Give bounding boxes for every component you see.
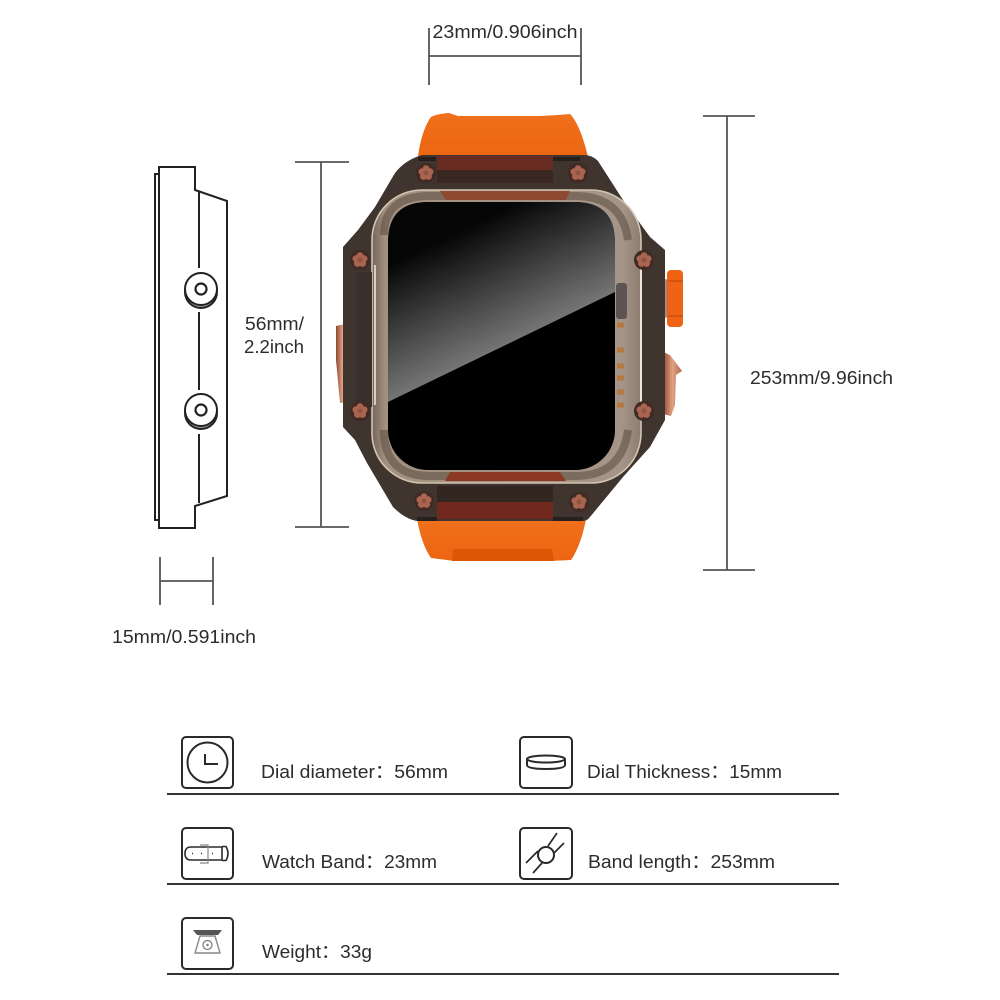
- side view of watch case: [155, 167, 227, 528]
- dimension: case thickness 15mm: [112, 557, 256, 647]
- case top band: [418, 156, 580, 183]
- spec row: band length: [520, 828, 775, 879]
- translucent inner frame: [372, 190, 641, 483]
- label: watch band: Watch Band：23mm: [262, 851, 437, 872]
- divider row 2: [167, 883, 839, 885]
- spec row: weight: [182, 918, 372, 969]
- dimension: total length 253mm: 253mm/9.96inch: [750, 367, 893, 388]
- crown: [658, 270, 683, 327]
- spec row: dial diameter: [182, 737, 448, 788]
- dimension: case thickness 15mm: 15mm/0.591inch: [112, 626, 256, 647]
- internal parts seen through left side: [356, 265, 376, 407]
- case body: [343, 155, 665, 521]
- side buttons: [336, 323, 682, 416]
- screen: [388, 202, 615, 470]
- case bottom band: [417, 486, 583, 521]
- side button: upper: [185, 273, 217, 308]
- icon: disc: [520, 737, 572, 788]
- side button: lower: [185, 394, 217, 429]
- label: band length: Band length：253mm: [588, 851, 775, 872]
- dimension: case height 56mm: 2.2inch: [244, 336, 304, 357]
- divider row 3: [167, 973, 839, 975]
- label: dial thickness: Dial Thickness：15mm: [587, 761, 782, 782]
- dimension: strap width 23mm: 23mm/0.906inch: [432, 21, 578, 42]
- dimension: case height 56mm: [244, 162, 349, 527]
- strap: bottom: [417, 519, 586, 561]
- icon: weighing scale: [182, 918, 233, 969]
- icon: strap buckle: [182, 828, 233, 879]
- case screws: [350, 163, 654, 512]
- icon: watch with strap lines: [520, 828, 572, 879]
- dimension: case height 56mm: 56mm/: [245, 313, 305, 334]
- label: weight: Weight：33g: [262, 941, 372, 962]
- divider row 1: [167, 793, 839, 795]
- spec row: dial thickness: [520, 737, 782, 788]
- spec row: watch band: [182, 828, 437, 879]
- icon: clock: [182, 737, 233, 788]
- strap: top: [418, 113, 588, 157]
- dimension: strap width 23mm: [429, 21, 581, 85]
- dimension: total length 253mm: [703, 116, 893, 570]
- watch product photo: [336, 113, 683, 561]
- label: dial diameter: Dial diameter：56mm: [261, 761, 448, 782]
- internal parts seen through right side: [616, 262, 642, 405]
- screen glare: [388, 202, 615, 402]
